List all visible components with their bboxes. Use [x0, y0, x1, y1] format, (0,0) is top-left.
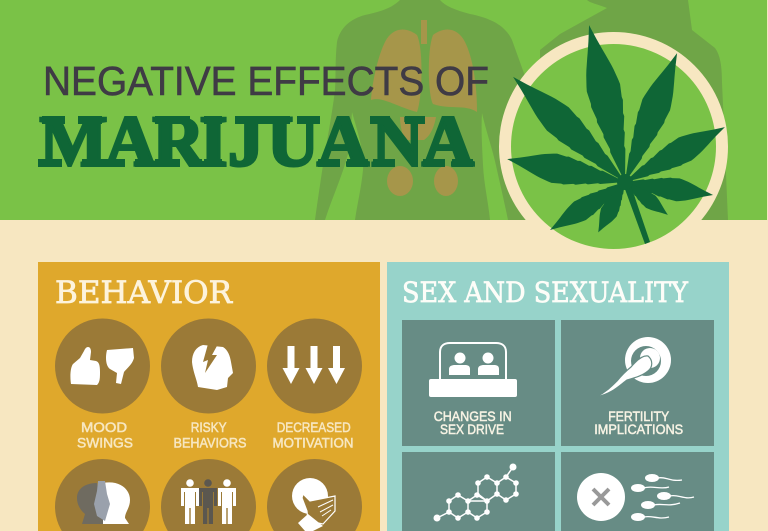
- tile: hormones: [402, 452, 555, 531]
- icon: thumbs up and down: [70, 347, 134, 385]
- left body silhouette: [315, 0, 530, 220]
- right lung: [429, 30, 477, 112]
- icon: three people: [181, 479, 236, 524]
- item: risky behaviors: [161, 318, 256, 450]
- emblem ring: [505, 38, 722, 255]
- label: fertility implications: FERTILITY: [608, 409, 669, 424]
- label: mood swings: SWINGS: [77, 436, 133, 450]
- label: mood swings: MOOD: [81, 420, 127, 435]
- label: risky behaviors: [174, 420, 246, 450]
- panel: behavior: [38, 262, 380, 531]
- heading: sex and sexuality: SEX AND SEXUALITY: [402, 276, 688, 309]
- label: risky behaviors: RISKY: [191, 420, 227, 435]
- item: split personality circle: [55, 459, 150, 531]
- label: mood swings: [77, 420, 133, 450]
- emblem: cannabis leaf in circle: [502, 21, 731, 255]
- item: peer group circle: [161, 459, 256, 531]
- icon: head with lightning: [192, 344, 233, 390]
- cannabis leaf: [502, 21, 731, 244]
- person: dark: [199, 479, 217, 524]
- tile: changes in sex drive: [402, 320, 555, 446]
- item: decreased motivation: [267, 318, 362, 450]
- icon: three down arrows: [282, 346, 345, 384]
- stomach: [400, 117, 436, 140]
- item: mood swings: [55, 318, 150, 450]
- label: risky behaviors: BEHAVIORS: [174, 436, 246, 450]
- left lung: [371, 30, 422, 112]
- label: decreased motivation: [272, 420, 354, 450]
- icon: crossed circle and sperm: [577, 473, 694, 521]
- heading: behavior: BEHAVIOR: [55, 275, 234, 311]
- person: left: [181, 479, 199, 524]
- panel: sex and sexuality: [387, 262, 729, 531]
- title line: negative effects of: NEGATIVE EFFECTS OF: [43, 58, 489, 104]
- header banner: [0, 0, 767, 220]
- icon: hand over face: [292, 478, 335, 531]
- person: right: [218, 479, 236, 524]
- lungs and organs: [371, 20, 477, 196]
- icon: molecule: [434, 464, 519, 522]
- item: hand to face circle: [267, 459, 362, 531]
- icon: overlapping heads: [77, 481, 130, 524]
- label: changes in sex drive: SEX DRIVE: [440, 422, 504, 437]
- label: changes in sex drive: [434, 409, 512, 437]
- left kidney: [387, 166, 413, 196]
- icon: sperm and egg: [596, 337, 671, 397]
- label: fertility implications: IMPLICATIONS: [594, 422, 683, 437]
- label: decreased motivation: DECREASED: [277, 420, 351, 435]
- label: fertility implications: [594, 409, 683, 437]
- right body silhouette: [540, 0, 728, 220]
- trachea: [421, 20, 427, 44]
- label: changes in sex drive: CHANGES IN: [434, 409, 512, 424]
- icon: couple in bed: [429, 343, 517, 397]
- label: decreased motivation: MOTIVATION: [272, 436, 354, 450]
- right kidney: [434, 166, 458, 196]
- title line: marijuana: MARIJUANA: [40, 102, 474, 182]
- tile: fertility implications: [561, 320, 714, 446]
- tile: sperm count: [561, 452, 714, 531]
